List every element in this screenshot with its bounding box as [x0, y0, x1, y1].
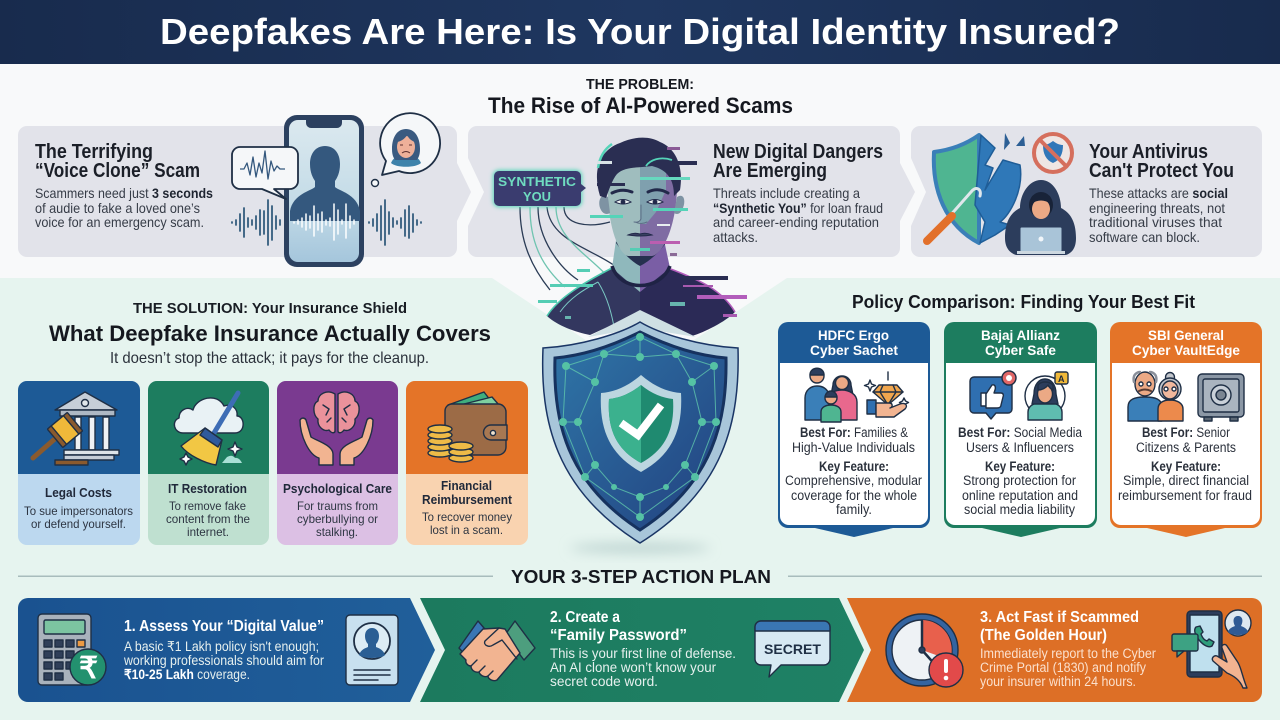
icon: family [805, 368, 857, 422]
text: new digital dangers: and career-ending reputation [713, 214, 879, 230]
text: new digital dangers [713, 141, 883, 245]
text: financial reimbursement: To recover money [422, 510, 512, 524]
text: SBI General details: Key Feature: [1151, 459, 1221, 474]
text: Bajaj Allianz details: Key Feature: [985, 459, 1055, 474]
text: HDFC Ergo details [785, 425, 922, 517]
icon: phone with silhouette [284, 115, 364, 267]
text: financial reimbursement: Reimbursement [422, 493, 513, 507]
text: Bajaj Allianz details: Strong protection for [963, 473, 1076, 488]
text: IT restoration [166, 482, 250, 539]
text: antivirus: engineering threats, not [1089, 200, 1225, 216]
icon: influencer [1025, 372, 1068, 420]
text: IT restoration: internet. [187, 525, 229, 539]
text: SBI General details: Simple, direct financial [1123, 473, 1249, 488]
text: step 2: “Family Password” [550, 627, 687, 644]
heading: the solution: It doesn’t stop the attack; it pays for the cleanup. [110, 350, 429, 367]
card: financial reimbursement [406, 381, 528, 545]
glitch bars [538, 147, 747, 319]
badge: synthetic you [493, 170, 586, 207]
text: IT restoration: IT Restoration [168, 482, 247, 496]
text: voice clone scam: The Terrifying [35, 141, 153, 163]
text: new digital dangers: “Synthetic You” for loan fraud [713, 200, 883, 216]
icon: influencer: A [1058, 374, 1065, 384]
text: step 1 [123, 618, 324, 682]
inner green shield with check [601, 375, 681, 472]
text: HDFC Ergo details: High-Value Individuals [792, 440, 915, 455]
icon: wallet and coins [428, 392, 507, 462]
text: step 3: (The Golden Hour) [980, 627, 1107, 644]
text: SBI General details: Citizens & Parents [1136, 440, 1236, 455]
illustration: synthetic wires [520, 207, 615, 290]
card: psychological care [277, 381, 398, 545]
text: legal costs: To sue impersonators [24, 504, 133, 518]
text: SBI General details: Best For: Senior [1142, 425, 1230, 440]
title: SBI General: SBI General [1148, 327, 1224, 343]
title: HDFC Ergo: HDFC Ergo [818, 327, 889, 343]
card: SBI General [1110, 322, 1262, 537]
text: financial reimbursement: lost in a scam. [430, 523, 503, 537]
badge: synthetic you: SYNTHETIC [498, 174, 577, 189]
title: Bajaj Allianz [981, 327, 1060, 358]
text: antivirus: Can't Protect You [1089, 160, 1234, 182]
shield network [559, 333, 720, 521]
text: Bajaj Allianz details: Users & Influencers [966, 440, 1074, 455]
text: antivirus [1089, 141, 1234, 245]
text: step 3 [980, 609, 1156, 689]
icon: sound wave right [369, 200, 421, 245]
text: psychological care: cyberbullying or [297, 512, 378, 526]
heading: the problem: The Rise of AI-Powered Scams [488, 93, 793, 118]
icon: central insurance shield [543, 310, 738, 553]
text: voice clone scam: “Voice Clone” Scam [35, 160, 200, 182]
title: HDFC Ergo: Cyber Sachet [810, 342, 898, 358]
icon: diamond in hand [864, 372, 908, 417]
card: legal costs [18, 381, 140, 545]
panel: antivirus background [911, 126, 1262, 257]
heading: the solution: THE SOLUTION: Your Insurance Shield [133, 301, 407, 317]
title: HDFC Ergo [810, 327, 898, 358]
text: Bajaj Allianz details: social media liability [964, 502, 1075, 517]
text: legal costs: or defend yourself. [31, 517, 126, 531]
eyes, brows, nose and mouth [612, 190, 668, 236]
text: antivirus: software can block. [1089, 229, 1200, 245]
text: HDFC Ergo details: Best For: Families & [800, 425, 908, 440]
icon: brain held by hands [300, 392, 373, 465]
text: HDFC Ergo details: family. [836, 502, 872, 517]
text: new digital dangers: Threats include creating a [713, 185, 860, 201]
text: step 2: This is your first line of defense. [550, 646, 736, 661]
text: antivirus: These attacks are social [1089, 185, 1228, 201]
step 2 banner [420, 598, 864, 702]
text: step 2 [550, 609, 736, 689]
icon: hooded hacker with laptop [1005, 180, 1076, 255]
text: Bajaj Allianz details: online reputation and [962, 488, 1078, 503]
text: psychological care: stalking. [316, 525, 358, 539]
text: Bajaj Allianz details: Best For: Social Media [958, 425, 1082, 440]
icon: senior couple [1128, 372, 1183, 421]
text: step 3: 3. Act Fast if Scammed [980, 609, 1139, 626]
title: SBI General: Cyber VaultEdge [1132, 342, 1240, 358]
text: HDFC Ergo details: Key Feature: [819, 459, 889, 474]
heading: policy comparison: Policy Comparison: Finding Your Best Fit [852, 292, 1195, 312]
text: voice clone scam: voice for an emergency scam. [35, 214, 204, 230]
text: financial reimbursement: Financial [441, 479, 492, 493]
text: step 3: Immediately report to the Cyber [980, 646, 1156, 661]
heading: the problem: THE PROBLEM: [586, 77, 694, 93]
text: step 3: Crime Portal (1830) and notify [980, 660, 1146, 675]
text: step 3: your insurer within 24 hours. [980, 674, 1136, 689]
header banner [0, 0, 1280, 64]
shirt [547, 268, 735, 336]
icon: clock with alert [886, 614, 963, 687]
icon: calculator and rupee: ₹ [79, 652, 98, 685]
card: Bajaj Allianz [944, 322, 1097, 537]
text: step 2: secret code word. [550, 674, 658, 689]
text: new digital dangers: New Digital Dangers [713, 141, 883, 163]
text: voice clone scam: Scammers need just 3 seconds [35, 185, 213, 201]
text: voice clone scam: of audie to fake a loved one’s [35, 200, 200, 216]
step 1 banner [18, 598, 435, 702]
panel: voice clone background [18, 126, 457, 257]
text: new digital dangers: Are Emerging [713, 160, 827, 182]
solution background band [0, 278, 1280, 720]
text: psychological care [283, 482, 392, 539]
neck [612, 238, 670, 292]
icon: phone call in hand [1172, 610, 1251, 688]
card: HDFC Ergo [778, 322, 930, 537]
heading: the problem [488, 77, 793, 118]
step 3 banner [847, 598, 1262, 702]
icon: broken shield with crowbar [927, 133, 1025, 243]
text: HDFC Ergo details: coverage for the whole [791, 488, 917, 503]
card: IT restoration [148, 381, 269, 545]
icon: calculator and rupee [38, 614, 106, 685]
header banner: Deepfakes Are Here: Is Your Digital Identity Insured? [160, 11, 1120, 52]
icon: sound wave left [232, 200, 280, 245]
text: Bajaj Allianz details [958, 425, 1082, 517]
arrow: dangers to antivirus [900, 158, 926, 226]
title: Bajaj Allianz: Bajaj Allianz [981, 327, 1060, 343]
heading: the solution: What Deepfake Insurance Actually Covers [49, 321, 491, 346]
text: step 2: 2. Create a [550, 609, 620, 626]
icon: cloud and broom [174, 393, 243, 465]
text: legal costs: Legal Costs [45, 486, 112, 500]
face [599, 164, 684, 256]
text: step 1: ₹10-25 Lakh coverage. [124, 667, 250, 682]
text: IT restoration: To remove fake [169, 499, 246, 513]
illustration: glitched face [538, 138, 747, 336]
heading: the solution [49, 301, 491, 367]
text: HDFC Ergo details: Comprehensive, modular [785, 473, 922, 488]
icon: ID card [346, 615, 398, 685]
text: voice clone scam [35, 141, 213, 230]
text: psychological care: For traums from [297, 499, 378, 513]
text: psychological care: Psychological Care [283, 482, 392, 496]
text: legal costs [24, 486, 133, 531]
title: Bajaj Allianz: Cyber Safe [985, 342, 1056, 358]
text: SBI General details: reimbursement for fraud [1118, 488, 1252, 503]
text: antivirus: traditional viruses that [1089, 214, 1222, 230]
icon: thumbs up [970, 371, 1016, 419]
panel: new dangers background [468, 126, 900, 257]
text: step 1: 1. Assess Your “Digital Value” [124, 618, 324, 635]
arrow: voice clone to dangers [457, 158, 484, 226]
text: step 2: An AI clone won’t know your [550, 660, 716, 675]
title: SBI General [1132, 327, 1240, 358]
icon: handshake [459, 621, 535, 681]
text: step 1: A basic ₹1 Lakh policy isn't enough; [124, 639, 319, 654]
icon: speech bubble with waveform [232, 147, 298, 199]
icon: no-shield ban sign [1034, 134, 1072, 172]
badge: synthetic you: YOU [523, 189, 551, 204]
text: new digital dangers: attacks. [713, 229, 758, 245]
icon: safe [1198, 374, 1244, 421]
hair [597, 138, 681, 198]
text: antivirus: Your Antivirus [1089, 141, 1208, 163]
icon: secret code bubble [755, 621, 830, 677]
icon: thought bubble with worried woman [372, 113, 440, 186]
text: SBI General details [1118, 425, 1252, 503]
text: step 1: working professionals should aim for [123, 653, 324, 668]
heading: action plan: YOUR 3-STEP ACTION PLAN [511, 567, 771, 587]
icon: secret code bubble: SECRET [764, 641, 821, 657]
icon: courthouse and gavel [33, 392, 119, 465]
text: IT restoration: content from the [166, 512, 250, 526]
text: financial reimbursement [422, 479, 513, 537]
